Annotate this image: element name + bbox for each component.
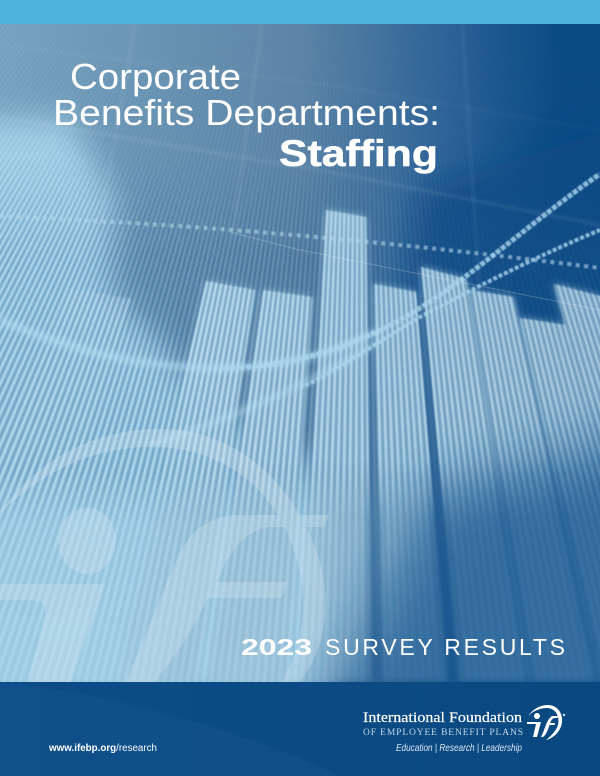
bar bottoms dimming <box>298 403 600 682</box>
watermark: IF logo <box>0 429 329 690</box>
faint grid lines <box>112 59 600 310</box>
dark zone behind right bars <box>372 156 526 554</box>
registered mark <box>563 714 565 716</box>
soft light across left bars <box>153 346 176 460</box>
organization name: International Foundation <box>363 710 523 726</box>
title: Corporate <box>70 56 241 97</box>
title <box>53 56 440 174</box>
title: Staffing <box>279 133 438 174</box>
dotted trend lines <box>0 174 600 445</box>
tagline: Education | Research | Leadership <box>396 742 522 754</box>
blurred lower bars <box>166 207 600 682</box>
light glow on the left <box>0 120 330 700</box>
perspective vertical stripes <box>0 110 600 682</box>
sharp upper bars <box>71 210 600 510</box>
survey results label: SURVEY RESULTS <box>325 634 565 660</box>
organization subtitle: OF EMPLOYEE BENEFIT PLANS <box>363 728 523 738</box>
website url: www.ifebp.org/research <box>48 743 157 754</box>
title: Benefits Departments: <box>53 92 440 133</box>
survey results label: 2023 <box>241 634 312 660</box>
bottom band <box>0 682 600 776</box>
top light blue band <box>0 0 600 24</box>
foundation logo <box>363 705 565 754</box>
icon: IF mark <box>527 705 562 740</box>
